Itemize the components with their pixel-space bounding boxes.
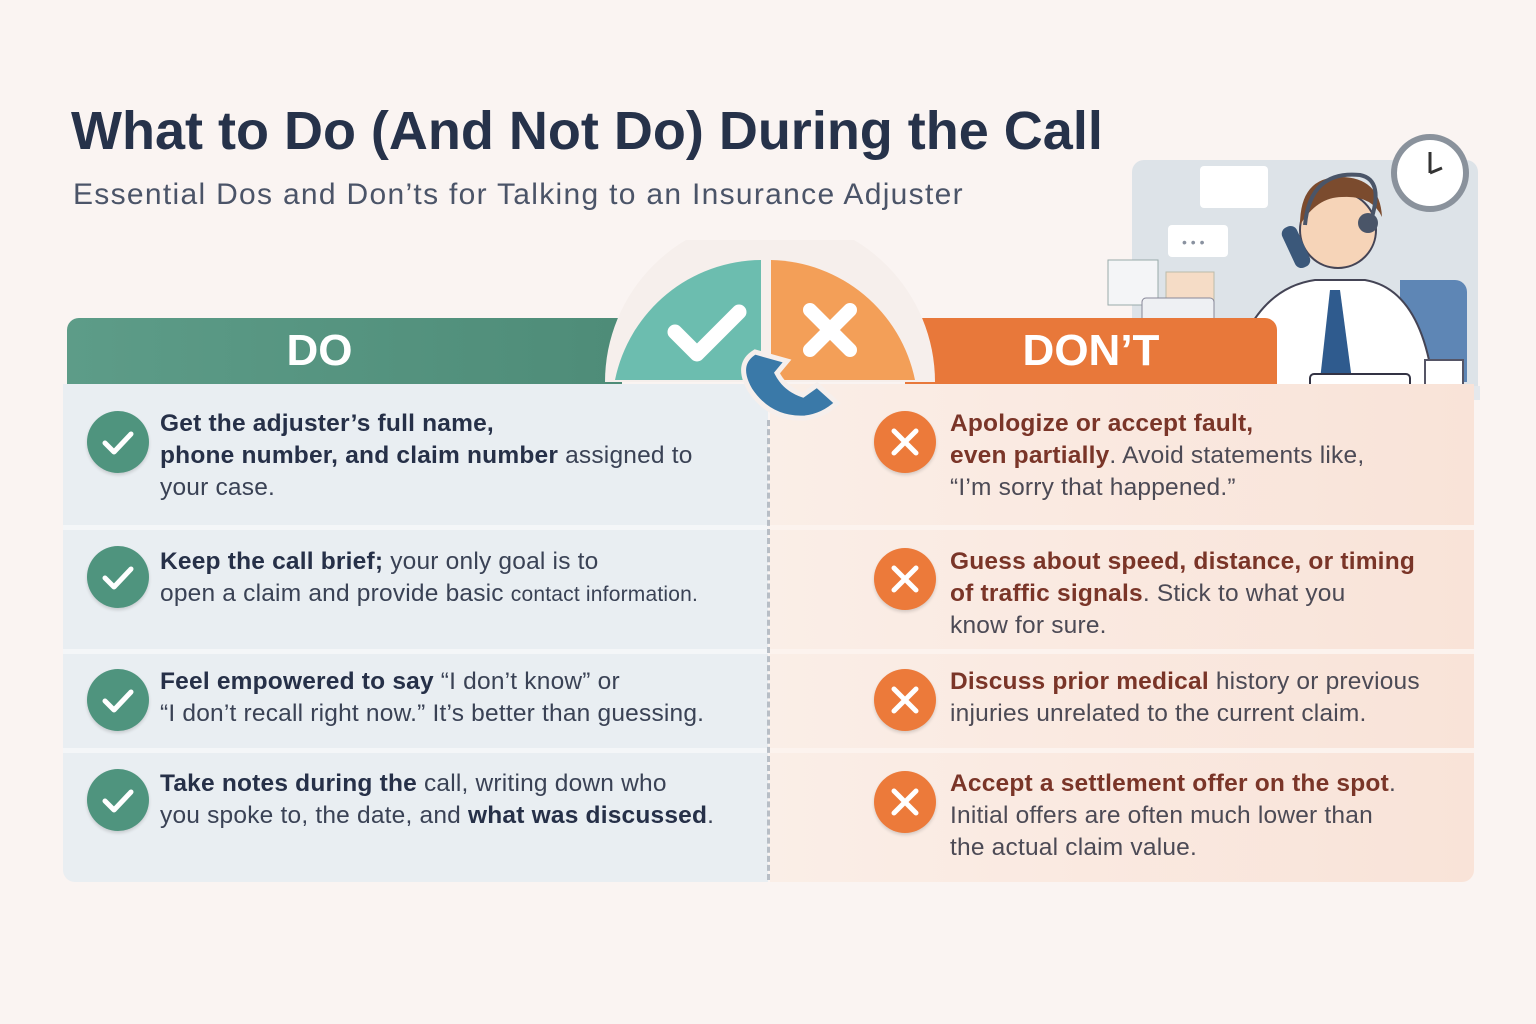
DO items [86, 410, 714, 834]
item 4 [87, 769, 149, 831]
text: of traffic signals. Stick to what you [950, 580, 1345, 607]
text: Initial offers are often much lower than [950, 802, 1373, 829]
item 3 [87, 669, 149, 731]
illustration: agent on phone [1108, 134, 1480, 400]
item 1 [87, 411, 149, 473]
item 4 [874, 771, 936, 833]
text: Take notes during the call, writing down who [160, 770, 667, 797]
DON'T header: DON’T [1023, 326, 1159, 375]
text: open a claim and provide basic contact information. [160, 580, 698, 607]
DO header [67, 318, 622, 384]
badge: check/x gauge with phone [605, 260, 935, 416]
illustration: agent on phone: • • • [1182, 234, 1205, 250]
panel: DO list [63, 384, 768, 882]
title: What to Do (And Not Do) During the Call [71, 101, 1103, 161]
text: Accept a settlement offer on the spot. [950, 770, 1396, 797]
panel: DON'T list [770, 384, 1474, 882]
text: Keep the call brief; your only goal is to [160, 548, 598, 575]
text: “I’m sorry that happened.” [950, 474, 1236, 501]
subtitle: Essential Dos and Don’ts for Talking to an Insurance Adjuster [73, 178, 964, 211]
text: you spoke to, the date, and what was discussed. [160, 802, 714, 829]
text: the actual claim value. [950, 834, 1197, 861]
item 1 [874, 411, 936, 473]
DON'T items [873, 410, 1420, 861]
text: know for sure. [950, 612, 1107, 639]
text: Discuss prior medical history or previous [950, 668, 1420, 695]
text: Feel empowered to say “I don’t know” or [160, 668, 620, 695]
text: Guess about speed, distance, or timing [950, 548, 1415, 575]
item 2 [87, 546, 149, 608]
text: injuries unrelated to the current claim. [950, 700, 1367, 727]
DO header: DO [286, 326, 352, 375]
text: “I don’t recall right now.” It’s better than guessing. [160, 700, 704, 727]
DON'T header [905, 318, 1277, 384]
text: your case. [160, 474, 275, 501]
text: Get the adjuster’s full name, [160, 410, 494, 437]
item 3 [874, 669, 936, 731]
item 2 [874, 548, 936, 610]
text: Apologize or accept fault, [950, 410, 1253, 437]
text: even partially. Avoid statements like, [950, 442, 1364, 469]
text: phone number, and claim number assigned to [160, 442, 693, 469]
